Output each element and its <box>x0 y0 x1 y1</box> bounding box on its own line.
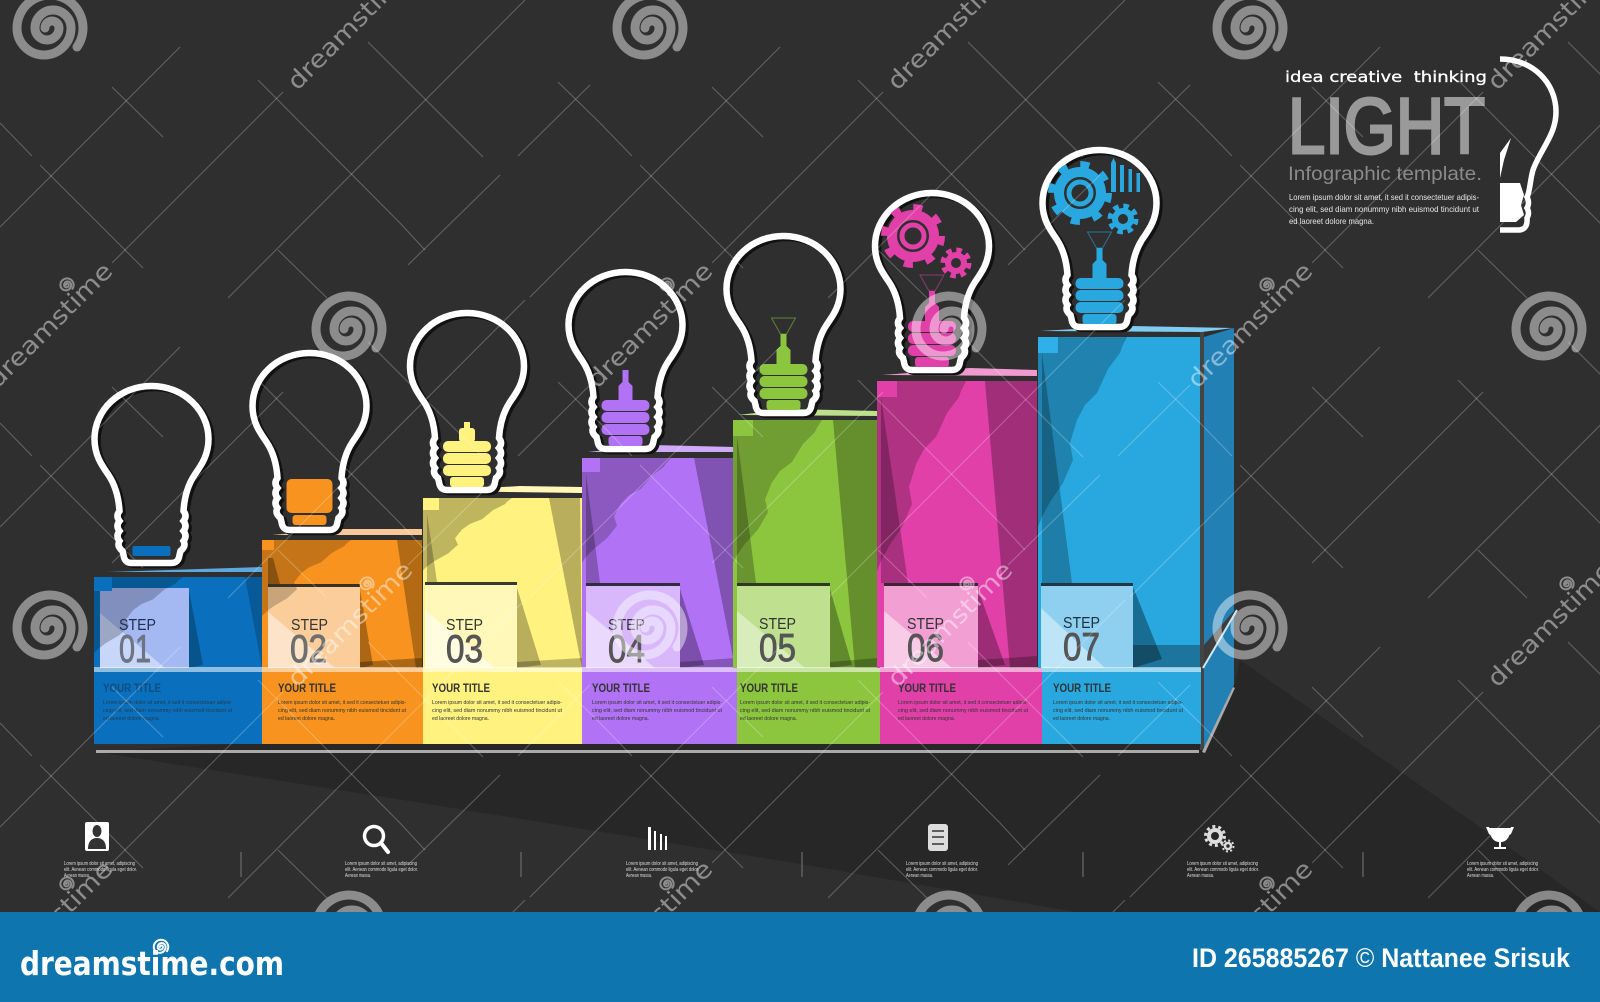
step 03 text: ed laoreet dolore magna. <box>432 716 489 722</box>
footer logo text: dreamstime.com <box>20 944 284 983</box>
item 1 text: elit. Aenean commodo ligula eget dolor. <box>64 867 137 873</box>
panel: step 03 bar <box>423 486 582 744</box>
watermark text: dreamstime <box>1482 556 1600 692</box>
panel: step 02 bar <box>262 529 423 744</box>
step 06 number: 06 <box>907 627 944 670</box>
item 2 text: elit. Aenean commodo ligula eget dolor. <box>345 867 418 873</box>
step 06 text <box>898 681 1028 722</box>
icon: bulb 3 <box>410 313 527 492</box>
step 05 text <box>740 681 870 722</box>
step 04 text <box>592 681 722 722</box>
item 4 text: Lorem ipsum dolor sit amet, adipiscing <box>906 861 978 867</box>
step 04 label: STEP <box>608 617 645 634</box>
step 07 label: STEP <box>1063 615 1100 632</box>
step 05 label: STEP <box>759 616 796 633</box>
item 4 text: Aenean massa. <box>906 873 933 879</box>
step 07 text: YOUR TITLE <box>1053 681 1111 695</box>
step 06 label: STEP <box>907 616 944 633</box>
watermark text: dreamstime <box>1182 855 1318 991</box>
platform base line <box>96 687 1235 753</box>
item 5 text: Aenean massa. <box>1187 873 1214 879</box>
step 07 text: cing elit, sed diam nonummy nibh euismod tincidunt ut <box>1053 708 1183 714</box>
step 02 text <box>278 681 406 722</box>
icon: bulb 2 <box>252 353 370 532</box>
image id and credit: ID 265885267 © Nattanee Srisuk <box>1192 943 1571 973</box>
tagline: idea creative thinking <box>1285 68 1487 86</box>
step 07 text: ed laoreet dolore magna. <box>1053 716 1110 722</box>
step 05 text: YOUR TITLE <box>740 681 798 695</box>
watermark text: dreamstime <box>282 556 418 692</box>
panel: step 07 bar <box>1038 326 1237 750</box>
item 6 text: Aenean massa. <box>1467 873 1494 879</box>
icon: gears <box>1206 826 1234 852</box>
watermark text: dreamstime <box>1182 257 1318 393</box>
step 02 text: YOUR TITLE <box>278 681 336 695</box>
intro text: cing elit, sed diam nonummy nibh euismod tincidunt ut <box>1289 204 1480 214</box>
step 07 text <box>1053 681 1183 722</box>
item 2 text <box>345 861 418 879</box>
step 04 number: 04 <box>608 628 645 671</box>
icon: trophy <box>1486 827 1514 849</box>
step 06 text: ed laoreet dolore magna. <box>898 716 955 722</box>
icon: settings list <box>928 824 948 851</box>
step 02 number: 02 <box>290 628 327 671</box>
panel: step 05 bar <box>733 409 880 744</box>
step 01 label: STEP <box>119 617 156 634</box>
panel: step 06 bar <box>877 368 1042 744</box>
item 6 text <box>1467 861 1539 879</box>
step 01 text: Lorem ipsum dolor sit amet, it sed it consectetuer adipis- <box>103 700 232 706</box>
step 02 text: ed laoreet dolore magna. <box>278 716 335 722</box>
item 6 text: Lorem ipsum dolor sit amet, adipiscing <box>1467 861 1538 867</box>
icon: half bulb with thumbs-up <box>1500 59 1556 230</box>
step 02 text: Lorem ipsum dolor sit amet, it sed it consectetuer adipis- <box>278 700 406 706</box>
icon: bulb 7 with gears and chart <box>1042 150 1160 329</box>
step 03 number: 03 <box>446 628 483 671</box>
intro text: Lorem ipsum dolor sit amet, it sed it consectetuer adipis- <box>1289 192 1479 202</box>
step 02 label: STEP <box>291 617 328 634</box>
step 03 text: cing elit, sed diam nonummy nibh euismod tincidunt ut <box>432 708 562 714</box>
item 5 text <box>1187 861 1259 879</box>
watermark text: dreamstime <box>582 855 718 991</box>
item 5 text: Lorem ipsum dolor sit amet, adipiscing <box>1187 861 1258 867</box>
step 05 text: Lorem ipsum dolor sit amet, it sed it consectetuer adipis- <box>740 700 870 706</box>
step 01 number: 01 <box>119 628 151 671</box>
item 6 text: elit. Aenean commodo ligula eget dolor. <box>1467 867 1539 873</box>
watermark text: dreamstime <box>582 257 718 393</box>
step 04 text: YOUR TITLE <box>592 681 650 695</box>
item 1 text: Aenean massa. <box>64 873 90 879</box>
item 2 text: Aenean massa. <box>345 873 371 879</box>
step 04 text: ed laoreet dolore magna. <box>592 716 649 722</box>
step 02 text: cing elit, sed diam nonummy nibh euismod tincidunt ut <box>278 708 406 714</box>
bottom icon row <box>64 822 1539 879</box>
step 01 text: cing elit, sed diam nonummy nibh euismod tincidunt ut <box>103 708 232 714</box>
item 4 text: elit. Aenean commodo ligula eget dolor. <box>906 867 978 873</box>
panel: step 04 bar <box>582 445 737 744</box>
icon: magnifier <box>364 826 388 852</box>
step 01 text: ed laoreet dolore magna. <box>103 716 160 722</box>
step 03 text: YOUR TITLE <box>432 681 490 695</box>
panel: step 01 bar <box>94 567 262 744</box>
icon: person card <box>85 822 109 851</box>
item 4 text <box>906 861 978 879</box>
footer banner <box>0 912 1600 1002</box>
footer logo spiral <box>154 940 168 953</box>
intro text <box>1289 192 1480 226</box>
icon: bulb 4 <box>568 272 686 451</box>
icon: bulb 1 <box>94 386 212 565</box>
watermark text: dreamstime <box>882 556 1018 692</box>
item 2 text: Lorem ipsum dolor sit amet, adipiscing <box>345 861 417 867</box>
item 1 text <box>64 861 137 879</box>
step 01 text <box>103 681 232 722</box>
icon: bars <box>648 827 667 850</box>
item 5 text: elit. Aenean commodo ligula eget dolor. <box>1187 867 1259 873</box>
subtitle: Infographic template. <box>1288 164 1482 185</box>
item 3 text: elit. Aenean commodo ligula eget dolor. <box>626 867 699 873</box>
item 3 text <box>626 861 699 879</box>
step 04 text: Lorem ipsum dolor sit amet, it sed it consectetuer adipis- <box>592 700 722 706</box>
long cast shadow <box>97 660 1600 912</box>
step 06 text: Lorem ipsum dolor sit amet, it sed it consectetuer adipis- <box>898 700 1028 706</box>
step 05 text: ed laoreet dolore magna. <box>740 716 797 722</box>
step 05 text: cing elit, sed diam nonummy nibh euismod tincidunt ut <box>740 708 870 714</box>
heading LIGHT: LIGHT <box>1288 81 1485 170</box>
item 3 text: Lorem ipsum dolor sit amet, adipiscing <box>626 861 698 867</box>
watermark small spirals <box>60 278 1574 889</box>
step 03 label: STEP <box>446 617 483 634</box>
step 03 text: Lorem ipsum dolor sit amet, it sed it consectetuer adipis- <box>432 700 562 706</box>
step 06 text: cing elit, sed diam nonummy nibh euismod tincidunt ut <box>898 708 1028 714</box>
icon: bulb 6 with gears <box>875 193 992 372</box>
step 06 text: YOUR TITLE <box>898 681 956 695</box>
intro text: ed laoreet dolore magna. <box>1289 216 1374 226</box>
step 04 text: cing elit, sed diam nonummy nibh euismod tincidunt ut <box>592 708 722 714</box>
step 03 text <box>432 681 562 722</box>
item 1 text: Lorem ipsum dolor sit amet, adipiscing <box>64 861 135 867</box>
step 05 number: 05 <box>759 627 796 670</box>
step 01 text: YOUR TITLE <box>103 681 161 695</box>
step 07 text: Lorem ipsum dolor sit amet, it sed it consectetuer adipis- <box>1053 700 1183 706</box>
step 07 number: 07 <box>1063 626 1100 669</box>
icon: bulb 5 <box>726 236 844 415</box>
title block <box>1285 68 1487 226</box>
item 3 text: Aenean massa. <box>626 873 652 879</box>
